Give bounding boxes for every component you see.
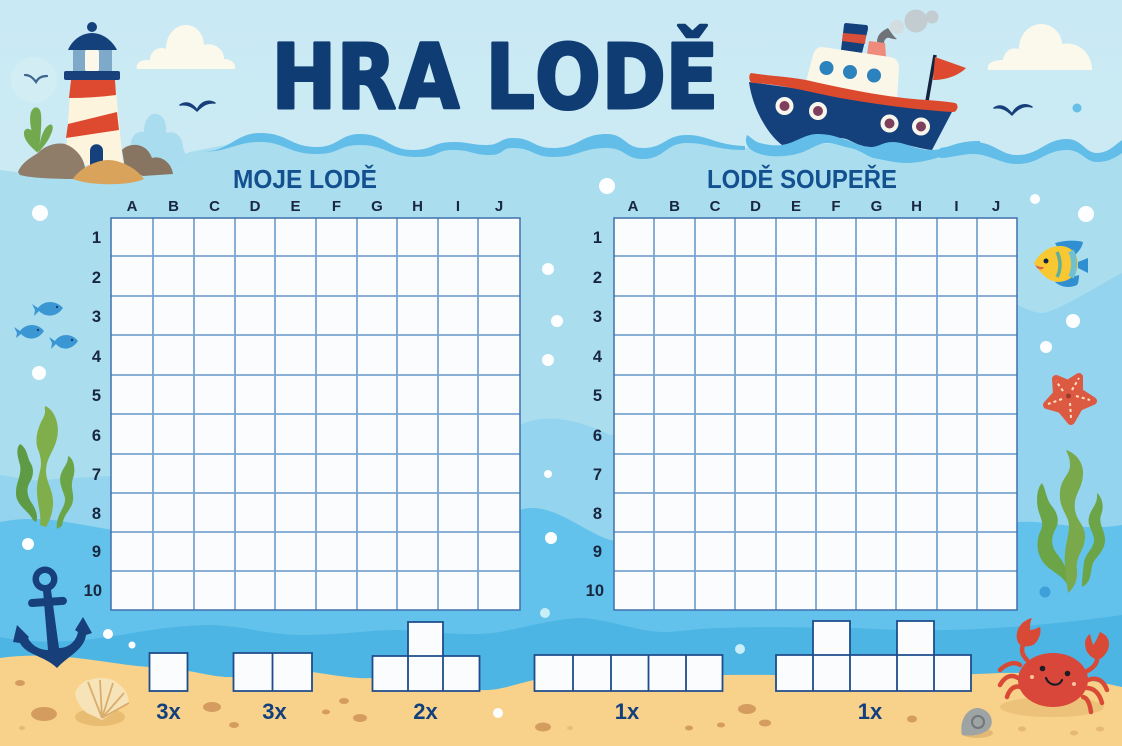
- cloud: right: [988, 24, 1092, 70]
- column letters: lodě soupeře: H: [911, 198, 922, 215]
- ship: [746, 10, 980, 163]
- column letters: lodě soupeře: E: [791, 198, 801, 215]
- plant: [24, 107, 53, 153]
- count labels: 2x: [413, 699, 438, 724]
- row numbers: lodě soupeře: 6: [593, 427, 602, 445]
- smoke: [877, 10, 938, 43]
- count labels: 1x: [858, 699, 883, 724]
- grid: lodě soupeře: [614, 218, 1017, 610]
- heading: moje lodě: MOJE LODĚ: [233, 164, 377, 194]
- snail shell: [961, 708, 993, 738]
- ship piece: five cells: [534, 655, 722, 691]
- row numbers: lodě soupeře: 1: [593, 229, 602, 247]
- ship piece: double tower: [776, 621, 971, 691]
- anchor: [13, 566, 92, 668]
- count labels: 3x: [156, 699, 181, 724]
- starfish: [1047, 377, 1093, 421]
- column letters: moje lodě: J: [495, 198, 503, 215]
- row numbers: moje lodě: 1: [92, 229, 101, 247]
- column letters: lodě soupeře: D: [750, 198, 761, 215]
- cabin: [806, 47, 899, 100]
- sand mound: [73, 160, 144, 184]
- row numbers: lodě soupeře: 2: [593, 269, 602, 287]
- column letters: moje lodě: G: [371, 198, 383, 215]
- cabin portholes: [820, 61, 881, 82]
- rocks: [18, 143, 85, 179]
- column letters: moje lodě: E: [290, 198, 301, 215]
- row numbers: moje lodě: 6: [92, 427, 101, 445]
- column letters: lodě soupeře: G: [871, 198, 882, 215]
- deck rim: [749, 73, 958, 112]
- count labels: 3x: [262, 699, 287, 724]
- funnel: [841, 23, 868, 53]
- column letters: moje lodě: D: [250, 198, 261, 215]
- row numbers: moje lodě: [84, 229, 102, 600]
- shell: [75, 678, 129, 726]
- foam wave in front of hull: [746, 134, 980, 163]
- crab: [1000, 618, 1109, 717]
- row numbers: lodě soupeře: [586, 229, 604, 600]
- row numbers: moje lodě: 2: [92, 269, 101, 287]
- column letters: moje lodě: C: [209, 198, 220, 215]
- yellow fish: [1034, 241, 1088, 287]
- bush behind rocks: [131, 114, 190, 165]
- column letters: lodě soupeře: I: [954, 198, 959, 215]
- row numbers: lodě soupeře: 4: [593, 348, 603, 366]
- pebbles: [15, 680, 1104, 736]
- gallery: [64, 71, 120, 80]
- red stripes: [69, 80, 116, 98]
- row numbers: moje lodě: 9: [92, 543, 101, 561]
- column letters: moje lodě: F: [332, 198, 341, 215]
- roof: [68, 33, 117, 50]
- seaweed left: [16, 406, 74, 529]
- column letters: moje lodě: B: [168, 198, 179, 215]
- row numbers: lodě soupeře: 8: [593, 505, 602, 523]
- column letters: lodě soupeře: [628, 198, 1000, 215]
- bird right: [994, 105, 1032, 115]
- column letters: moje lodě: [127, 198, 503, 215]
- count labels: [156, 699, 883, 724]
- ship piece: T shape: [372, 622, 480, 691]
- column letters: lodě soupeře: B: [669, 198, 680, 215]
- bubbles: [22, 104, 1094, 718]
- row numbers: moje lodě: 10: [84, 582, 102, 600]
- column letters: lodě soupeře: A: [628, 198, 639, 215]
- row numbers: moje lodě: 4: [92, 348, 102, 366]
- smoke stack pink: [867, 41, 886, 57]
- pale circle with bird: [11, 57, 57, 103]
- column letters: moje lodě: I: [456, 198, 460, 215]
- column letters: lodě soupeře: C: [710, 198, 721, 215]
- row numbers: moje lodě: 5: [92, 387, 101, 405]
- fish school: [14, 302, 78, 349]
- flag: [927, 55, 966, 101]
- column letters: moje lodě: A: [127, 198, 138, 215]
- row numbers: moje lodě: 7: [92, 466, 101, 484]
- heading: lodě soupeře: LODĚ SOUPEŘE: [707, 164, 897, 194]
- door: [90, 144, 103, 165]
- row numbers: lodě soupeře: 5: [593, 387, 602, 405]
- hull portholes: [778, 99, 928, 134]
- lighthouse scene: [18, 22, 173, 184]
- count labels: 1x: [615, 699, 640, 724]
- lantern room: [73, 49, 112, 72]
- seaweed right: [1037, 450, 1105, 593]
- row numbers: lodě soupeře: 10: [586, 582, 604, 600]
- row numbers: lodě soupeře: 7: [593, 466, 602, 484]
- top wave band: [200, 133, 745, 159]
- cloud: left: [137, 25, 235, 69]
- column letters: moje lodě: H: [412, 198, 423, 215]
- grid: moje lodě: [111, 218, 520, 610]
- row numbers: lodě soupeře: 9: [593, 543, 602, 561]
- bird: [180, 101, 215, 111]
- column letters: lodě soupeře: J: [992, 198, 1000, 215]
- title: HRA LODĚ: [271, 25, 718, 129]
- row numbers: moje lodě: 3: [92, 308, 101, 326]
- row numbers: moje lodě: 8: [92, 505, 101, 523]
- background: sand: [0, 656, 1122, 746]
- tower: [65, 80, 123, 165]
- column letters: lodě soupeře: F: [831, 198, 841, 215]
- hull: [749, 82, 953, 150]
- row numbers: lodě soupeře: 3: [593, 308, 602, 326]
- ship piece: two cells: [234, 653, 312, 691]
- right wave band: [940, 139, 1122, 164]
- ship piece: single cell: [150, 653, 188, 691]
